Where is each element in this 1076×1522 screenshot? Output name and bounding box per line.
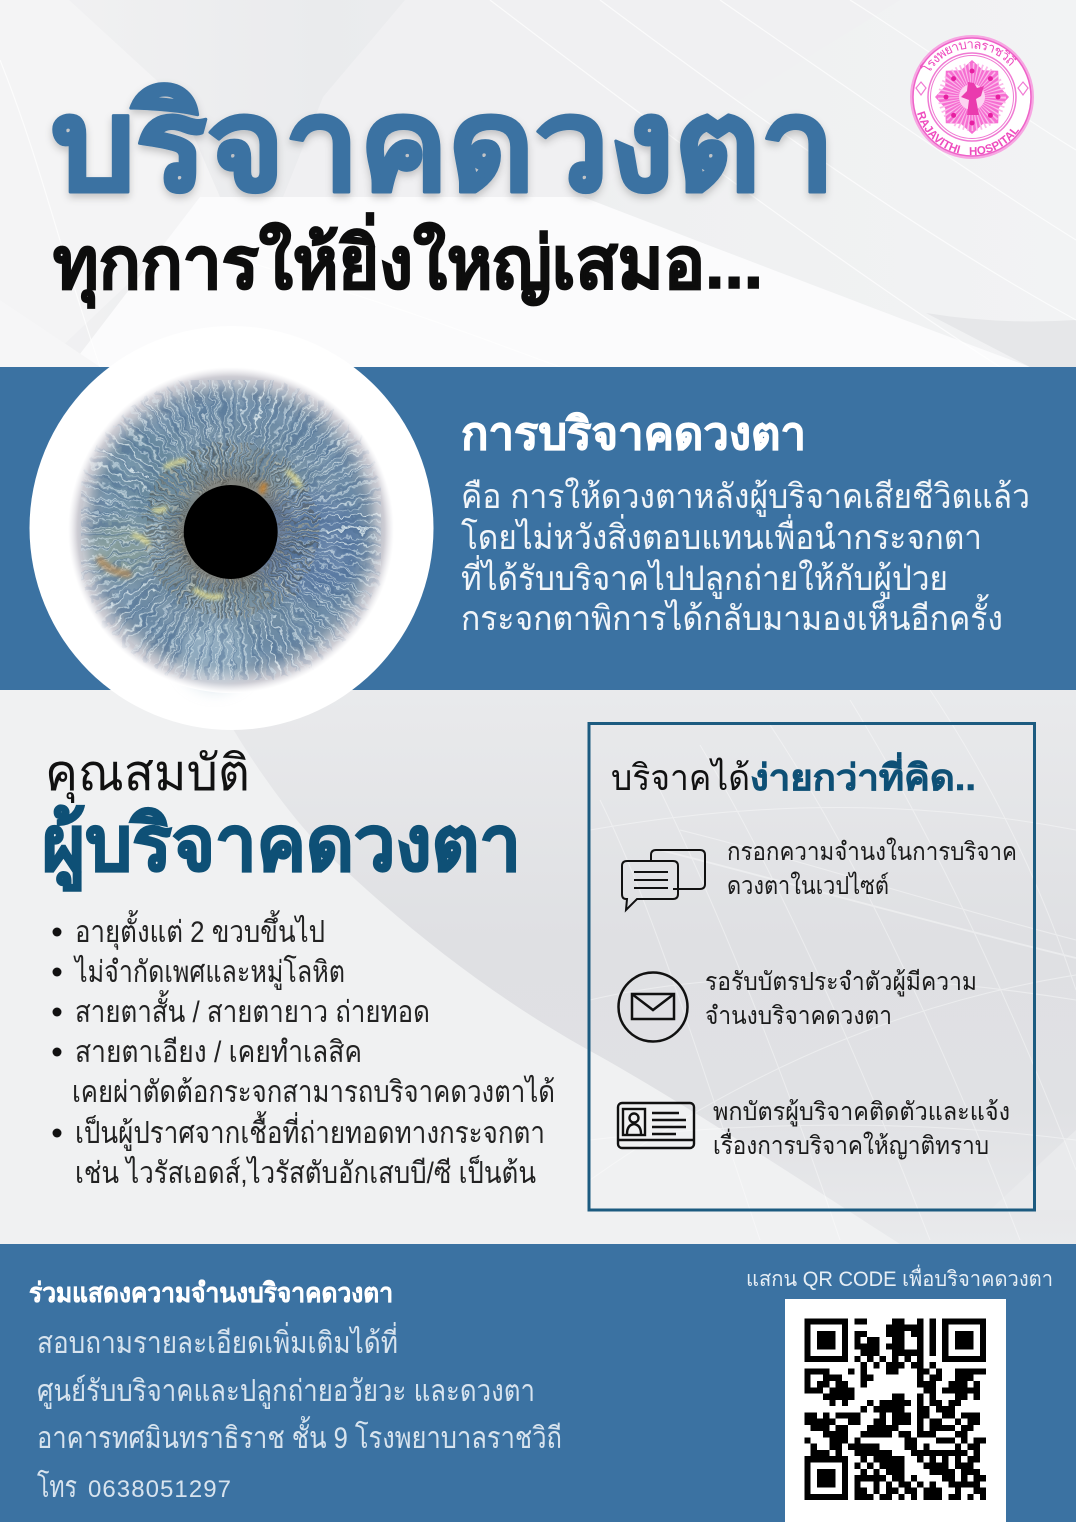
text: step 3: พกบัตรผู้บริจาคติดตัวและแจ้ง xyxy=(713,1098,1010,1127)
list: donor qualifications: สายตาสั้น / สายตายาว ถ่ายทอด xyxy=(75,990,430,1029)
heading: eye donation: การบริจาคดวงตา xyxy=(461,408,806,459)
heading: easier than you think: บริจาคได้ xyxy=(611,757,750,798)
list: donor qualifications: เช่น ไวรัสเอดส์,ไวรัสตับอักเสบบี/ซี เป็นต้น xyxy=(75,1154,536,1190)
text block: definition: คือ การให้ดวงตาหลังผู้บริจาคเสียชีวิตแล้ว xyxy=(461,477,1030,517)
icon: ID card xyxy=(618,1103,694,1148)
text block: definition: ที่ได้รับบริจาคไปปลูกถ่ายให้กับผู้ป่วย xyxy=(461,555,948,599)
heading: qualifications xyxy=(42,745,521,891)
text: scan QR caption: แสกน QR CODE เพื่อบริจาคดวงตา xyxy=(746,1264,1053,1291)
panel: footer xyxy=(0,1244,1076,1522)
list: donor qualifications: อายุตั้งแต่ 2 ขวบขึ้นไป xyxy=(75,910,325,951)
text: step 2 xyxy=(705,968,977,1030)
text block: contact details: ศูนย์รับบริจาคและปลูกถ่ายอวัยวะ และดวงตา xyxy=(37,1374,535,1409)
logo: Rajavithi Hospital seal: RAJAVITHI HOSPITAL xyxy=(917,111,1020,156)
text block: definition: โดยไม่หวังสิ่งตอบแทนเพื่อนำกระจกตา xyxy=(461,514,982,557)
heading: qualifications: คุณสมบัติ xyxy=(45,745,250,803)
text: step 2: รอรับบัตรประจำตัวผู้มีความ xyxy=(705,968,977,997)
panel: easy steps xyxy=(589,724,1034,1210)
text block: contact details: สอบถามรายละเอียดเพิ่มเติมได้ที่ xyxy=(37,1322,398,1360)
heading: qualifications: ผู้บริจาคดวงตา xyxy=(42,802,521,891)
list: donor qualifications: สายตาเอียง / เคยทำเลสิค xyxy=(75,1036,362,1069)
text: step 1 xyxy=(727,837,1017,900)
heading: easier than you think xyxy=(611,752,976,798)
text: step 3: เรื่องการบริจาคให้ญาติทราบ xyxy=(713,1128,989,1160)
list: donor qualifications xyxy=(52,910,555,1190)
QR code xyxy=(785,1299,1006,1522)
icon: pupil xyxy=(184,485,278,579)
text block: definition xyxy=(461,477,1030,638)
text block: contact details: 0638051297 xyxy=(88,1476,231,1503)
image: eye iris in white circle xyxy=(30,326,434,730)
text: step 1: กรอกความจำนงในการบริจาค xyxy=(727,837,1017,866)
text: step 3 xyxy=(713,1098,1010,1160)
text: step 1: ดวงตาในเวปไซต์ xyxy=(727,871,889,900)
icon: chat bubbles xyxy=(622,850,705,910)
icon: envelope in circle xyxy=(618,972,688,1042)
text block: contact details: อาคารทศมินทราธิราช ชั้น 9 โรงพยาบาลราชวิถี xyxy=(37,1416,562,1455)
subtitle: ทุกการให้ยิ่งใหญ่เสมอ... xyxy=(53,212,763,309)
heading: footer call to action: ร่วมแสดงความจำนงบริจาคดวงตา xyxy=(29,1278,393,1308)
text block: contact details: โทร xyxy=(37,1469,77,1504)
panel: what is eye donation xyxy=(0,367,1076,690)
logo: Rajavithi Hospital seal xyxy=(910,35,1034,159)
list: donor qualifications: ไม่จำกัดเพศและหมู่โลหิต xyxy=(73,954,345,990)
logo: Rajavithi Hospital seal: โรงพยาบาลราชวิถี xyxy=(920,41,1018,70)
text: step 2: จำนงบริจาคดวงตา xyxy=(705,1002,892,1030)
text block: contact details xyxy=(37,1322,562,1504)
list: donor qualifications: เป็นผู้ปราศจากเชื้อที่ถ่ายทอดทางกระจกตา xyxy=(75,1111,545,1151)
text block: definition: กระจกตาพิการได้กลับมามองเห็นอีกครั้ง xyxy=(461,594,1003,638)
title: บริจาคดวงตา xyxy=(51,72,835,218)
list: donor qualifications: เคยผ่าตัดต้อกระจกสามารถบริจาคดวงตาได้ xyxy=(72,1074,555,1109)
heading: easier than you think: ง่ายกว่าที่คิด.. xyxy=(750,752,976,798)
